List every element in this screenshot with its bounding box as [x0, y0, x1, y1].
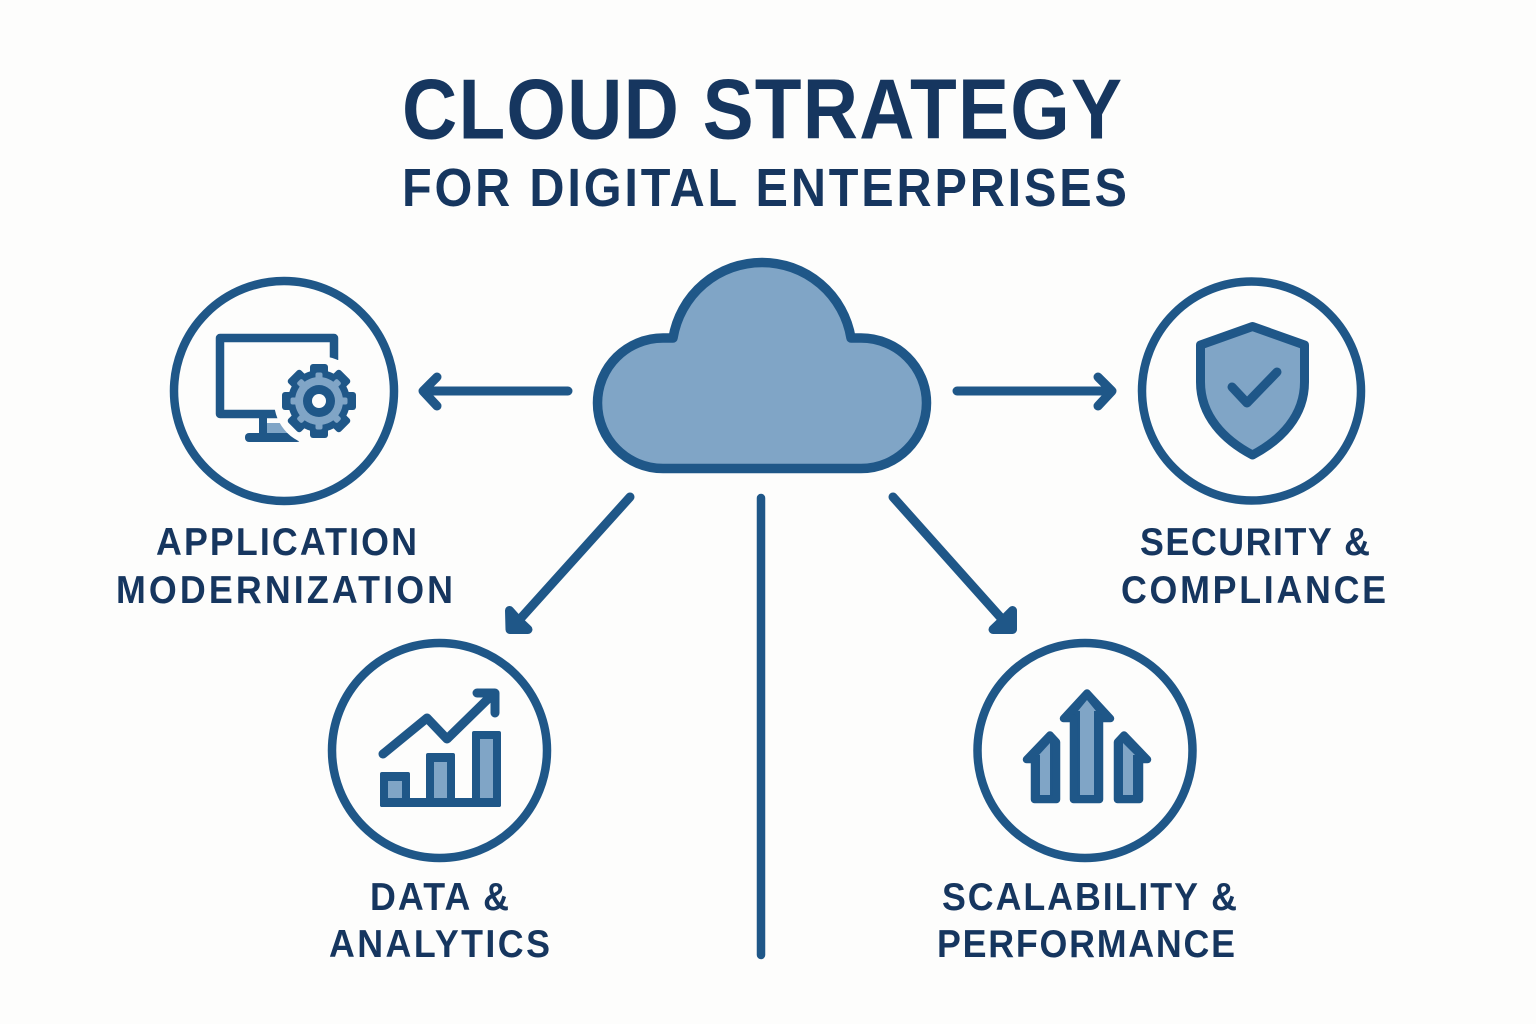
label: security and compliance: SECURITY & — [1140, 520, 1370, 563]
panel: application modernization — [116, 281, 453, 611]
icon: bar chart with trend arrow — [380, 693, 501, 807]
label: data and analytics — [329, 875, 550, 965]
arrow: to scalability and performance — [893, 497, 1012, 630]
icon circle: security and compliance — [1142, 282, 1361, 500]
label: application modernization: MODERNIZATION — [116, 568, 453, 611]
icon: central cloud — [598, 262, 926, 468]
label: application modernization — [116, 520, 453, 611]
icon circle: scalability and performance — [978, 643, 1192, 858]
icon circle: application modernization — [174, 281, 394, 501]
arrow: to data and analytics — [510, 497, 630, 630]
panel: security and compliance — [1121, 282, 1386, 611]
title: CLOUD STRATEGY — [402, 63, 1122, 157]
panel: data and analytics — [329, 643, 550, 965]
label: security and compliance: COMPLIANCE — [1121, 568, 1386, 611]
panel: scalability and performance — [937, 643, 1237, 965]
arrow: to security and compliance — [957, 377, 1112, 406]
label: data and analytics: DATA & — [370, 875, 509, 918]
icon: three upward arrows — [1026, 693, 1148, 800]
label: scalability and performance: SCALABILITY & — [942, 875, 1237, 918]
arrow: to application modernization — [423, 377, 568, 406]
icon: monitor with gear — [220, 338, 364, 446]
title: FOR DIGITAL ENTERPRISES — [402, 157, 1127, 218]
icon: shield with check — [1200, 326, 1304, 455]
central vertical line — [757, 498, 765, 955]
label: scalability and performance — [937, 875, 1237, 965]
label: data and analytics: ANALYTICS — [329, 922, 550, 965]
label: application modernization: APPLICATION — [156, 520, 417, 563]
label: security and compliance — [1121, 520, 1386, 611]
title — [402, 63, 1127, 218]
label: scalability and performance: PERFORMANCE — [937, 922, 1235, 965]
icon circle: data and analytics — [332, 643, 547, 858]
